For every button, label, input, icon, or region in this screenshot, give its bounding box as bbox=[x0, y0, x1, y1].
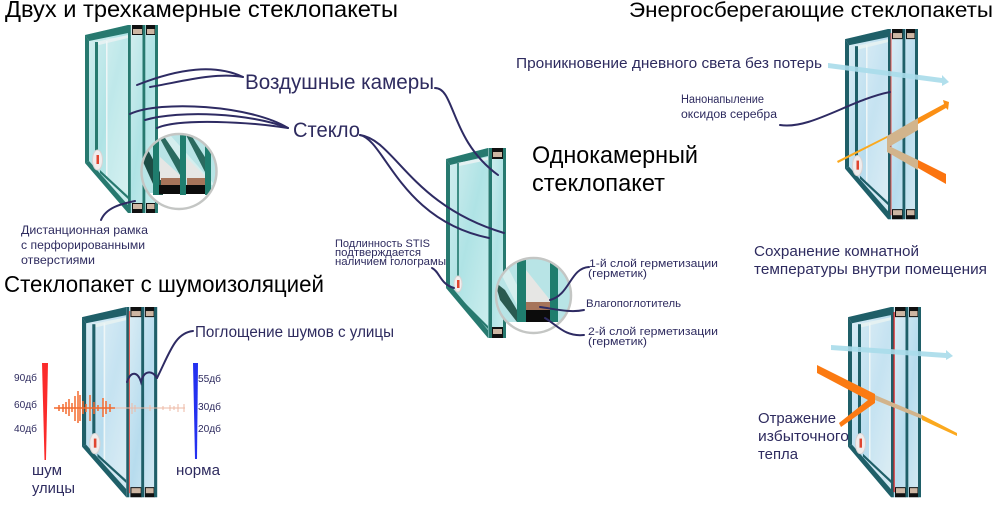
label: first sealing layer: 1-й слой герметизации bbox=[589, 258, 718, 270]
label: silver oxide coating bbox=[681, 94, 778, 121]
labels: noise levels: 40дб bbox=[14, 423, 37, 435]
title: single chamber bbox=[532, 142, 698, 197]
label: room temperature: температуры внутри помещения bbox=[754, 261, 987, 278]
magnifier: single chamber seal detail bbox=[495, 255, 573, 333]
labels: noise levels: 90дб bbox=[14, 372, 37, 384]
label: normal: норма bbox=[176, 462, 221, 479]
label: reflected heat: избыточного bbox=[758, 428, 849, 445]
label: spacer frame: Дистанционная рамка bbox=[21, 223, 148, 237]
label: reflected heat: тепла bbox=[758, 446, 799, 463]
title: single chamber: Однокамерный bbox=[532, 142, 698, 169]
window: noise insulation bbox=[82, 307, 157, 497]
waveform: sound passing through window bbox=[54, 391, 185, 423]
label: reflected heat bbox=[758, 410, 849, 463]
magnifier: triple glazing spacer detail bbox=[140, 130, 220, 209]
window: energy saving bbox=[845, 29, 918, 219]
arrow: heat rays energy window bbox=[837, 100, 949, 184]
arrow: reflected heat bbox=[817, 365, 957, 436]
arrow: daylight bbox=[828, 63, 949, 86]
window: single chamber bbox=[446, 148, 506, 338]
callout lines: single chamber bbox=[360, 88, 589, 335]
callout: silver nanocoating bbox=[780, 92, 890, 126]
label: spacer frame: отверстиями bbox=[21, 253, 95, 267]
label: street noise bbox=[32, 462, 75, 497]
label: hologram authenticity: наличием голограмы bbox=[335, 256, 446, 268]
label: room temperature bbox=[754, 243, 987, 278]
label: first sealing layer bbox=[588, 258, 718, 280]
label: second sealing layer: 2-й слой герметизации bbox=[588, 326, 718, 338]
window: triple glazing bbox=[85, 25, 158, 213]
label: hologram authenticity: Подлинность STIS bbox=[335, 238, 430, 250]
label: second sealing layer bbox=[588, 326, 718, 348]
labels: noise levels: 30дб bbox=[198, 401, 221, 413]
label: daylight: Проникновение дневного света без потерь bbox=[516, 55, 822, 72]
labels: noise levels: 55дб bbox=[198, 373, 221, 385]
label: spacer frame bbox=[21, 223, 148, 267]
label: street noise: шум bbox=[32, 462, 62, 479]
title: single chamber: стеклопакет bbox=[532, 170, 665, 197]
scale: street noise wedge bbox=[42, 363, 48, 460]
label: air chambers: Воздушные камеры bbox=[245, 71, 434, 94]
labels: noise levels bbox=[14, 372, 221, 435]
labels: noise levels: 60дб bbox=[14, 399, 37, 411]
label: glass: Стекло bbox=[293, 119, 360, 142]
label: street noise: улицы bbox=[32, 480, 75, 497]
label: silver oxide coating: Нанонапыление bbox=[681, 94, 764, 106]
window: heat reflection bbox=[848, 307, 921, 497]
label: desiccant: Влагопоглотитель bbox=[586, 298, 681, 310]
arrow: daylight through window bbox=[831, 345, 953, 360]
label: first sealing layer: (герметик) bbox=[588, 268, 647, 280]
label: room temperature: Сохранение комнатной bbox=[754, 243, 919, 260]
label: hologram authenticity bbox=[335, 238, 446, 268]
callout: noise absorption bbox=[127, 331, 193, 382]
label: noise absorption: Поглощение шумов с улицы bbox=[195, 324, 394, 341]
callout lines: triple glazing bbox=[101, 69, 288, 220]
scale: normal wedge bbox=[193, 363, 198, 459]
label: reflected heat: Отражение bbox=[758, 410, 836, 427]
label: second sealing layer: (герметик) bbox=[588, 336, 647, 348]
title: noise insulation: Стеклопакет с шумоизоляцией bbox=[4, 271, 324, 297]
label: hologram authenticity: подтверждается bbox=[335, 247, 421, 259]
label: spacer frame: с перфорированными bbox=[21, 238, 145, 252]
labels: noise levels: 20дб bbox=[198, 423, 221, 435]
label: silver oxide coating: оксидов серебра bbox=[681, 109, 778, 121]
